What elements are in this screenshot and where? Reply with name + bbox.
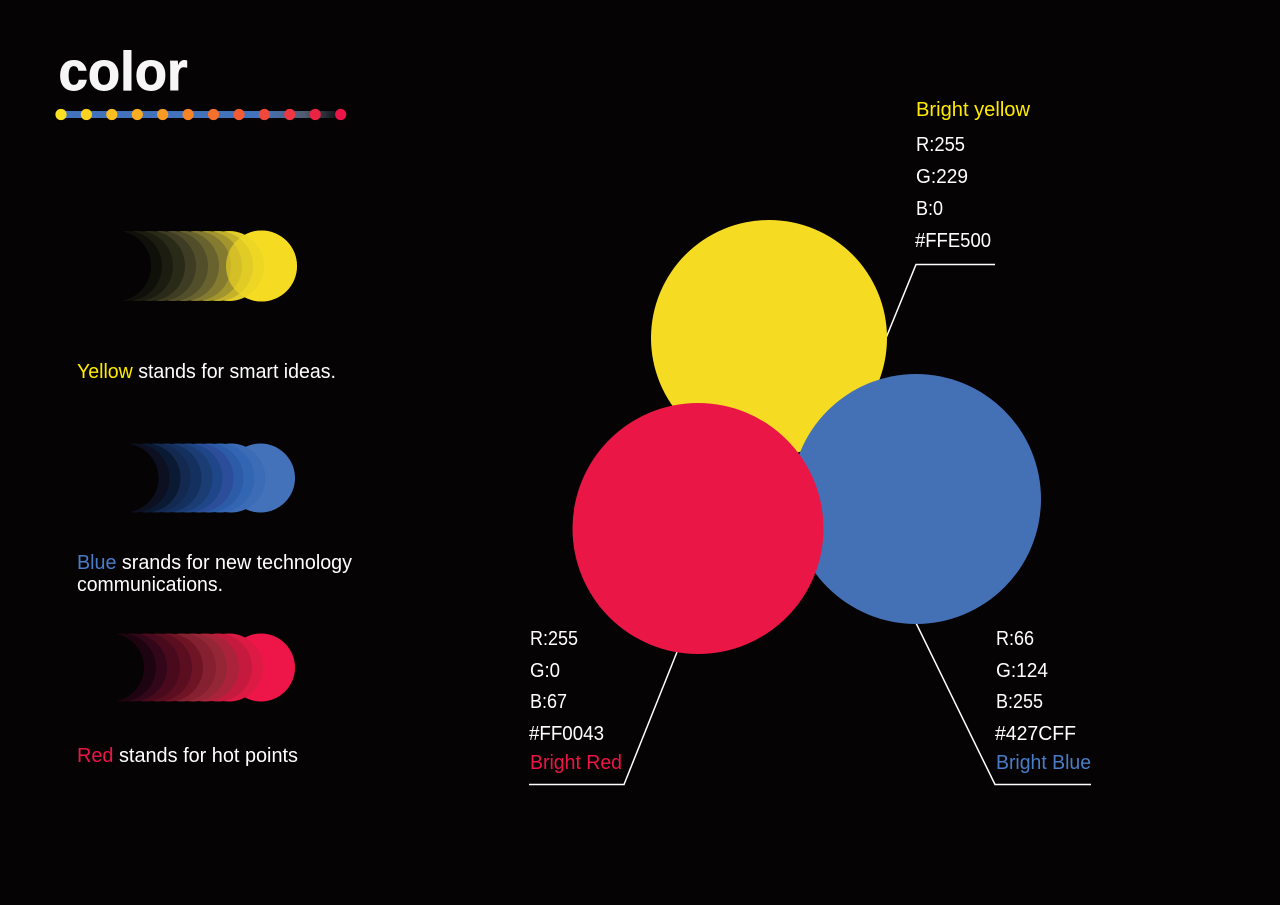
yellow colour specification: B:0 (916, 198, 943, 220)
blue colour specification: G:124 (996, 660, 1048, 682)
yellow colour specification: #FFE500 (915, 230, 991, 252)
text: yellow meaning: Yellow stands for smart ideas. (77, 361, 336, 383)
large yellow circle (651, 220, 887, 456)
blue callout leader line (916, 623, 1091, 784)
blue colour specification: #427CFF (995, 723, 1076, 745)
blue colour specification: Bright Blue (996, 752, 1091, 774)
yellow fading circles (81, 230, 297, 302)
red colour specification: R:255 (530, 628, 578, 650)
blue colour specification (995, 628, 1091, 774)
title: color (58, 40, 188, 102)
text: red meaning: Red stands for hot points (77, 745, 298, 767)
red colour specification (529, 628, 622, 774)
text: blue meaning: communications. (77, 574, 223, 596)
text: blue meaning: Blue srands for new technology (77, 552, 352, 574)
timeline of yellow to red dots (55, 109, 346, 120)
large red circle (572, 403, 824, 654)
yellow colour specification: R:255 (916, 134, 965, 156)
red colour specification: Bright Red (530, 752, 622, 774)
blue colour specification: B:255 (996, 691, 1043, 713)
red callout leader line (529, 652, 677, 784)
red colour specification: #FF0043 (529, 723, 604, 745)
text: blue meaning (77, 552, 352, 596)
yellow colour specification: Bright yellow (916, 99, 1031, 121)
yellow callout leader line (886, 264, 995, 338)
yellow colour specification (915, 99, 1031, 252)
blue colour specification: R:66 (996, 628, 1034, 650)
large blue circle (791, 374, 1041, 624)
yellow colour specification: G:229 (916, 166, 968, 188)
red fading circles (76, 634, 295, 702)
red colour specification: G:0 (530, 660, 560, 682)
blue fading circles (90, 444, 295, 512)
red colour specification: B:67 (530, 691, 567, 713)
